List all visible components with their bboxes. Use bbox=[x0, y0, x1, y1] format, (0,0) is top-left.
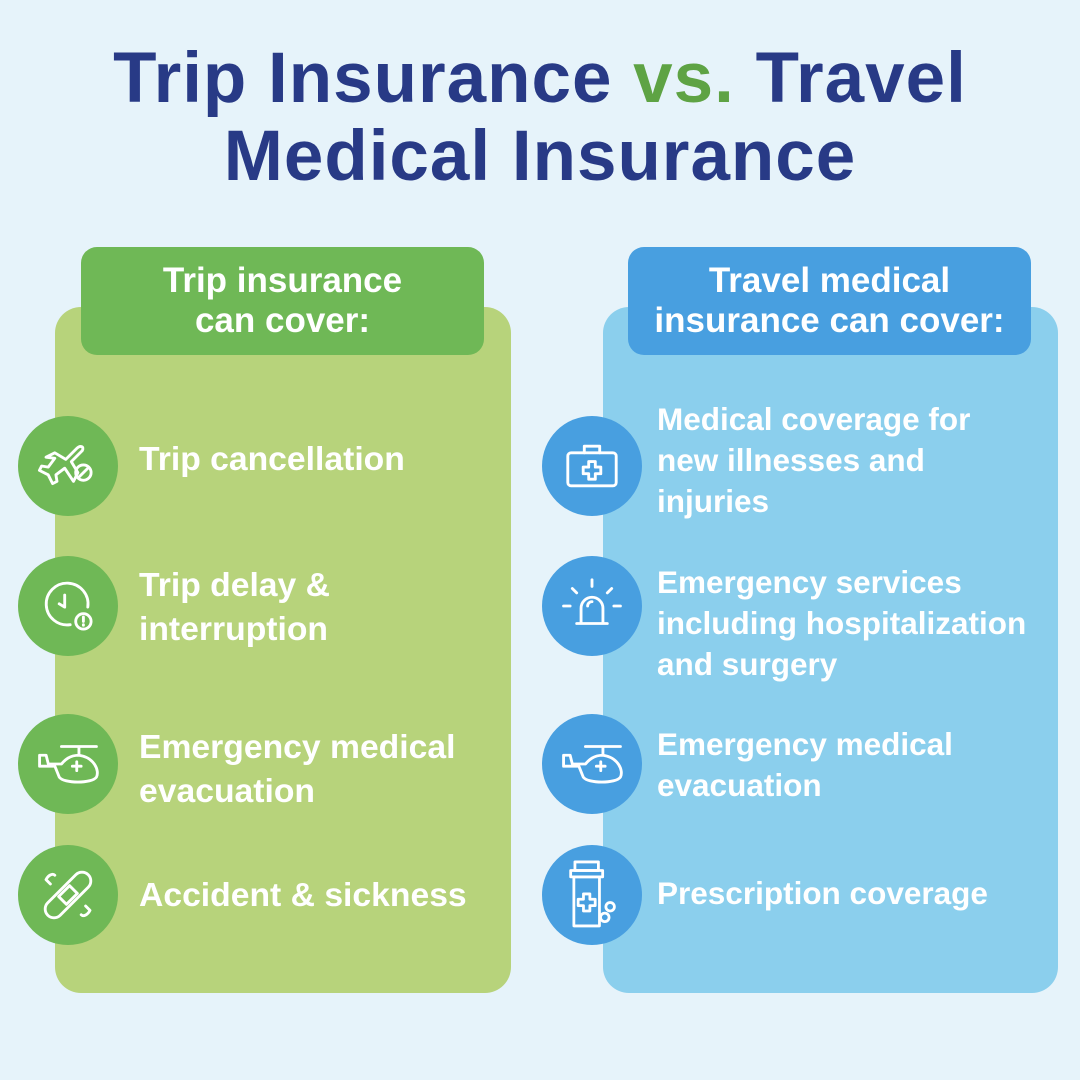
text: trip delay bbox=[139, 566, 330, 648]
icon: bandage bbox=[18, 845, 118, 945]
text: evacuation: evacuation bbox=[657, 767, 822, 803]
icon: first aid kit bbox=[542, 416, 642, 516]
text: medical coverage: injuries bbox=[657, 483, 769, 519]
text: trip delay: Trip delay & bbox=[139, 566, 330, 604]
text: accident: Accident & sickness bbox=[139, 876, 467, 914]
text: trip delay: interruption bbox=[139, 610, 328, 648]
text: emergency evacuation: evacuation bbox=[139, 772, 315, 810]
text: trip cancellation: Trip cancellation bbox=[139, 440, 405, 478]
icon: helicopter bbox=[18, 714, 118, 814]
icon: siren bbox=[542, 556, 642, 656]
text: medical coverage: new illnesses and bbox=[657, 442, 925, 478]
icon: clock bbox=[18, 556, 118, 656]
text: emergency evacuation bbox=[139, 728, 455, 810]
text: emergency services: including hospitalization bbox=[657, 605, 1026, 641]
title bbox=[113, 39, 967, 196]
panel: travel medical bbox=[603, 307, 1058, 993]
text: medical coverage bbox=[657, 401, 970, 519]
text: evacuation bbox=[657, 726, 953, 803]
heading: travel medical: insurance can cover: bbox=[654, 301, 1005, 340]
text: emergency services bbox=[657, 564, 1026, 682]
text: emergency services: and surgery bbox=[657, 646, 837, 682]
icon: helicopter blue bbox=[542, 714, 642, 814]
icon: pill bottle bbox=[542, 845, 642, 945]
text: emergency services: Emergency services bbox=[657, 564, 962, 600]
text: evacuation: Emergency medical bbox=[657, 726, 953, 762]
heading: trip insurance bbox=[81, 247, 484, 355]
heading: travel medical bbox=[628, 247, 1031, 355]
icon: plane cancel bbox=[18, 416, 118, 516]
text: emergency evacuation: Emergency medical bbox=[139, 728, 455, 766]
heading: trip insurance: Trip insurance bbox=[163, 261, 402, 300]
text: prescription: Prescription coverage bbox=[657, 875, 988, 911]
heading: travel medical: Travel medical bbox=[709, 261, 950, 300]
heading: trip insurance: can cover: bbox=[195, 301, 370, 340]
text: medical coverage: Medical coverage for bbox=[657, 401, 970, 437]
panel: trip insurance bbox=[55, 307, 511, 993]
title: Trip Insurance vs. Travel bbox=[113, 39, 967, 118]
title: Medical Insurance bbox=[224, 117, 856, 196]
